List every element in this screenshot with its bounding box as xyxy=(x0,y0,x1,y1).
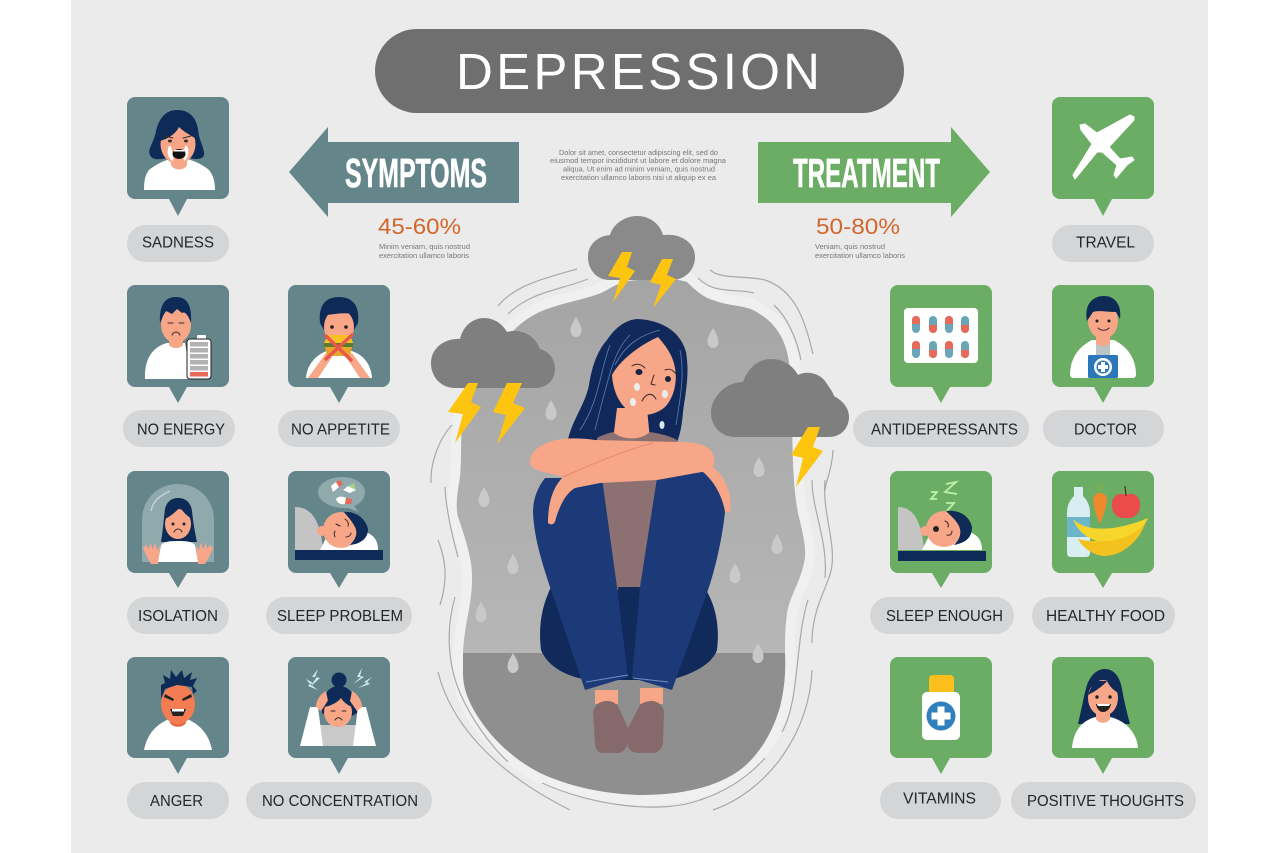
stat: treatment percentage: Veniam, quis nostrud xyxy=(815,242,885,251)
arrow: treatment xyxy=(758,127,990,217)
item: healthy food xyxy=(1032,471,1175,634)
bubble xyxy=(1052,471,1154,588)
left leg xyxy=(533,478,628,690)
label xyxy=(278,410,400,447)
item: no appetite xyxy=(278,285,400,447)
item: anger xyxy=(127,657,229,819)
bubble xyxy=(890,471,992,588)
label: SLEEP ENOUGH xyxy=(886,608,1003,625)
icon: vitamin bottle xyxy=(922,675,960,740)
halo and backdrop xyxy=(456,280,806,795)
label xyxy=(127,782,229,819)
icon: tired man and battery xyxy=(145,297,211,379)
item: sleep enough xyxy=(870,471,1014,634)
icon: sleeping person xyxy=(898,482,986,561)
icon: man refusing burger xyxy=(306,297,372,378)
icon: woman under glass dome xyxy=(142,484,214,564)
item: vitamins xyxy=(880,657,1001,819)
arrow: symptoms xyxy=(289,127,519,217)
label xyxy=(246,782,432,819)
bubble xyxy=(288,285,390,403)
bubble xyxy=(127,285,229,403)
item: isolation xyxy=(127,471,229,634)
cuffs xyxy=(586,675,668,682)
bubble xyxy=(890,657,992,774)
stat: treatment percentage: exercitation ullamco laboris xyxy=(815,251,905,260)
item: no concentration xyxy=(246,657,432,819)
icon: blister pack xyxy=(904,308,978,363)
arms xyxy=(530,438,731,524)
stat: symptoms percentage: 45-60% xyxy=(378,214,461,239)
bubble xyxy=(288,657,390,774)
label: NO CONCENTRATION xyxy=(262,793,418,810)
item: sadness xyxy=(127,97,229,262)
bubble xyxy=(1052,657,1154,774)
bubble xyxy=(127,97,229,216)
gap under shirt xyxy=(618,587,640,678)
icon: angry man xyxy=(144,670,212,750)
face xyxy=(612,337,676,429)
stat: symptoms percentage: exercitation ullamco laboris xyxy=(379,251,469,260)
central illustration: woman in storm xyxy=(431,216,849,810)
intro text block: exercitation ullamco laboris nisi ut aliquip ex ea xyxy=(561,173,717,182)
title xyxy=(375,29,904,113)
intro text block: Dolor sit amet, consectetur adipiscing elit, sed do xyxy=(559,148,718,157)
icon: bottle, carrot, apple, bananas xyxy=(1067,483,1148,557)
stat: treatment percentage: 50-80% xyxy=(816,214,900,239)
label xyxy=(853,410,1029,447)
stat: treatment percentage xyxy=(815,214,905,260)
label: POSITIVE THOUGHTS xyxy=(1027,793,1184,810)
label: SLEEP PROBLEM xyxy=(277,608,403,625)
title: DEPRESSION xyxy=(456,43,820,100)
neck xyxy=(613,408,650,440)
icon: smiling woman xyxy=(1072,669,1138,748)
item: doctor xyxy=(1043,285,1164,447)
arrow: symptoms: SYMPTOMS xyxy=(345,150,487,196)
label: TRAVEL xyxy=(1076,234,1135,252)
label: VITAMINS xyxy=(903,790,976,808)
label xyxy=(127,225,229,262)
bubble xyxy=(127,471,229,588)
label xyxy=(127,597,229,634)
item: positive thoughts xyxy=(1011,657,1196,819)
shoes xyxy=(593,701,664,753)
icon: airplane xyxy=(1073,115,1134,179)
arrow: treatment: TREATMENT xyxy=(793,150,940,196)
bubble xyxy=(1052,97,1154,216)
item: antidepressants xyxy=(853,285,1029,447)
label: ISOLATION xyxy=(138,608,218,625)
cloud: left xyxy=(431,318,555,444)
shins xyxy=(595,688,663,704)
stat: symptoms percentage xyxy=(378,214,470,260)
label: NO ENERGY xyxy=(137,422,225,438)
stat: symptoms percentage: Minim veniam, quis nostrud xyxy=(379,242,470,251)
shirt xyxy=(597,432,677,590)
label: NO APPETITE xyxy=(291,422,390,438)
label xyxy=(1043,410,1164,447)
icon: doctor with case xyxy=(1070,296,1136,378)
hair xyxy=(568,319,688,442)
contour lines xyxy=(431,269,833,810)
label: DOCTOR xyxy=(1074,422,1137,438)
intro text block: aliqua. Ut enim ad minim veniam, quis nostrud xyxy=(563,164,715,174)
cloud: right xyxy=(711,359,849,487)
bubble xyxy=(288,471,390,588)
label: HEALTHY FOOD xyxy=(1046,608,1165,625)
label: ANGER xyxy=(150,793,203,810)
seat of trousers xyxy=(540,570,718,680)
label: SADNESS xyxy=(142,234,214,252)
label xyxy=(1052,225,1154,262)
right leg xyxy=(632,470,725,690)
label xyxy=(870,597,1014,634)
label: ANTIDEPRESSANTS xyxy=(871,422,1018,438)
label xyxy=(880,782,1001,819)
icon: stressed woman holding head xyxy=(300,668,376,746)
intro text block xyxy=(550,148,727,182)
label xyxy=(123,410,235,447)
rain drops xyxy=(476,317,782,673)
intro text block: eiusmod tempor incididunt ut labore et dolore magna xyxy=(550,156,727,165)
icon: sleepless in bed xyxy=(295,477,383,560)
hair strands xyxy=(580,330,682,430)
bubble xyxy=(1052,285,1154,403)
cloud: top xyxy=(588,216,695,308)
label xyxy=(266,597,412,634)
bubble xyxy=(890,285,992,403)
item: travel xyxy=(1052,97,1154,262)
label xyxy=(1011,782,1196,819)
icon: crying woman xyxy=(144,110,215,190)
item: sleep problem xyxy=(266,471,412,634)
label xyxy=(1032,597,1175,634)
item: no energy xyxy=(123,285,235,447)
bubble xyxy=(127,657,229,774)
